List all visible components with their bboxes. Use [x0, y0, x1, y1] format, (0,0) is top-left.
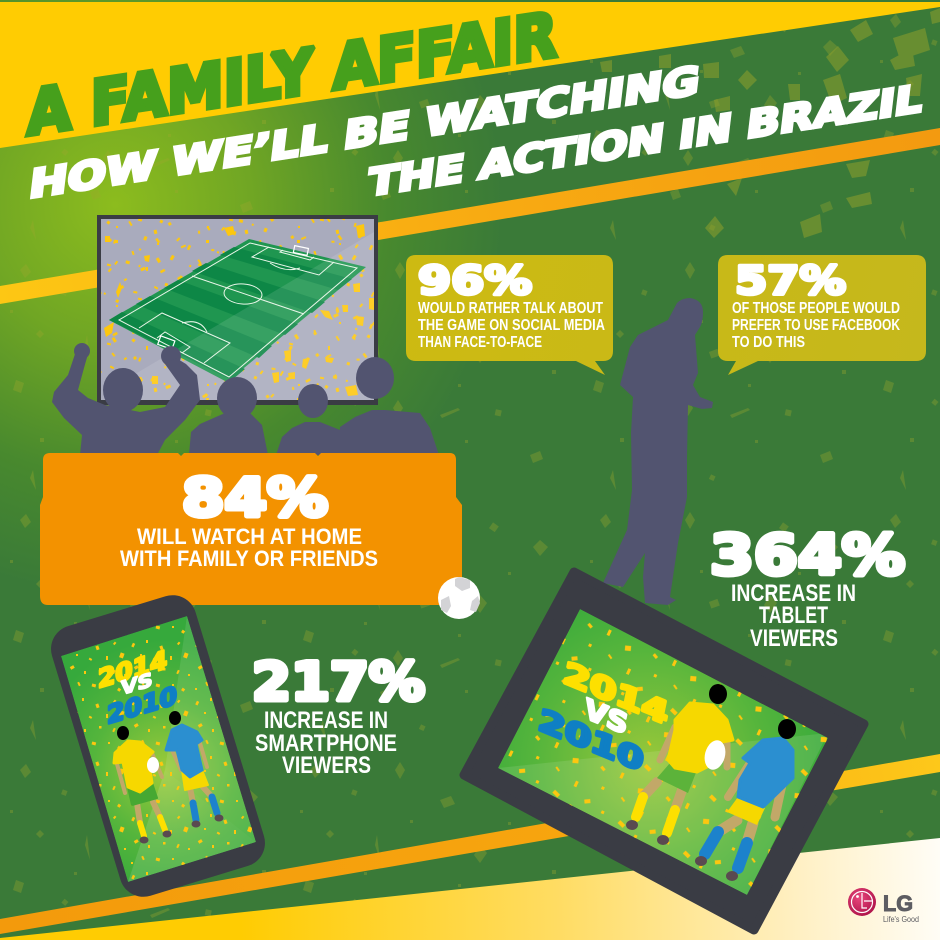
stat 96 label: THE GAME ON SOCIAL MEDIA — [418, 317, 605, 334]
phone screen — [61, 616, 256, 882]
sofa shape — [40, 453, 462, 605]
LG emblem — [848, 888, 876, 916]
sofa stat panel — [40, 453, 462, 605]
silhouettes: family on sofa — [52, 343, 439, 455]
stat 84 percent: 84% — [182, 468, 328, 529]
stat 364 label: TABLET — [759, 602, 828, 629]
phone text vs: VS — [121, 669, 153, 700]
stat 84 label: WILL WATCH AT HOME — [137, 524, 362, 549]
phone text 2014: 2014 — [98, 645, 167, 694]
stat 84 label: WITH FAMILY OR FRIENDS — [120, 546, 378, 571]
stat 96 label: THAN FACE-TO-FACE — [418, 334, 542, 351]
goal top — [293, 246, 308, 255]
third person — [276, 384, 345, 455]
stat 57 label: TO DO THIS — [732, 334, 805, 351]
stat 217 label — [255, 707, 397, 779]
LG logo — [848, 888, 919, 924]
stat 57 percent: 57% — [735, 259, 846, 304]
stat 217 label: INCREASE IN — [264, 707, 388, 734]
second person — [189, 377, 268, 455]
bottom orange stripe — [0, 754, 940, 934]
tablet text 2014: 2014 — [560, 656, 672, 732]
stat 364 label: INCREASE IN — [731, 580, 856, 607]
speech bubble 96 percent — [406, 255, 613, 375]
smartphone — [45, 589, 271, 903]
tablet player in yellow — [626, 684, 733, 845]
standing person silhouette — [603, 298, 713, 605]
player in blue — [166, 711, 224, 828]
tablet text vs: VS — [582, 694, 631, 741]
tablet text 2010: 2010 — [535, 703, 647, 779]
player in yellow — [114, 726, 172, 844]
top yellow band — [0, 2, 940, 148]
tablet — [464, 572, 864, 930]
subtitle line 2: THE ACTION IN BRAZIL — [366, 77, 925, 206]
LG tagline: Life's Good — [883, 915, 919, 924]
icon: football — [438, 577, 480, 619]
stat 217 label: SMARTPHONE — [255, 730, 397, 757]
tablet screen — [490, 600, 835, 900]
LG wordmark: LG — [883, 891, 913, 916]
television with pitch — [97, 215, 378, 405]
upper diagonal stripe — [0, 128, 940, 304]
stat 96 label: WOULD RATHER TALK ABOUT — [418, 300, 603, 317]
tablet player in blue — [695, 719, 796, 881]
stat 57 label — [732, 300, 900, 351]
stat 364 label — [731, 580, 856, 652]
fourth person — [339, 357, 439, 455]
stat 217 percent: 217% — [252, 652, 425, 713]
stat 84 label — [120, 524, 378, 571]
stat 364 percent: 364% — [710, 523, 905, 587]
stat 96 label — [418, 300, 605, 351]
goal bottom — [158, 336, 175, 349]
speech bubble 57 percent — [718, 255, 926, 375]
stat 96 percent: 96% — [418, 259, 532, 304]
phone text 2010: 2010 — [107, 681, 177, 730]
subtitle line 1: HOW WE’LL BE WATCHING — [27, 58, 702, 208]
football pitch — [109, 232, 374, 400]
bottom yellow corner — [0, 838, 940, 940]
person with raised arms — [52, 343, 200, 455]
stat 217 label: VIEWERS — [282, 752, 371, 779]
stat 364 label: VIEWERS — [750, 625, 838, 652]
